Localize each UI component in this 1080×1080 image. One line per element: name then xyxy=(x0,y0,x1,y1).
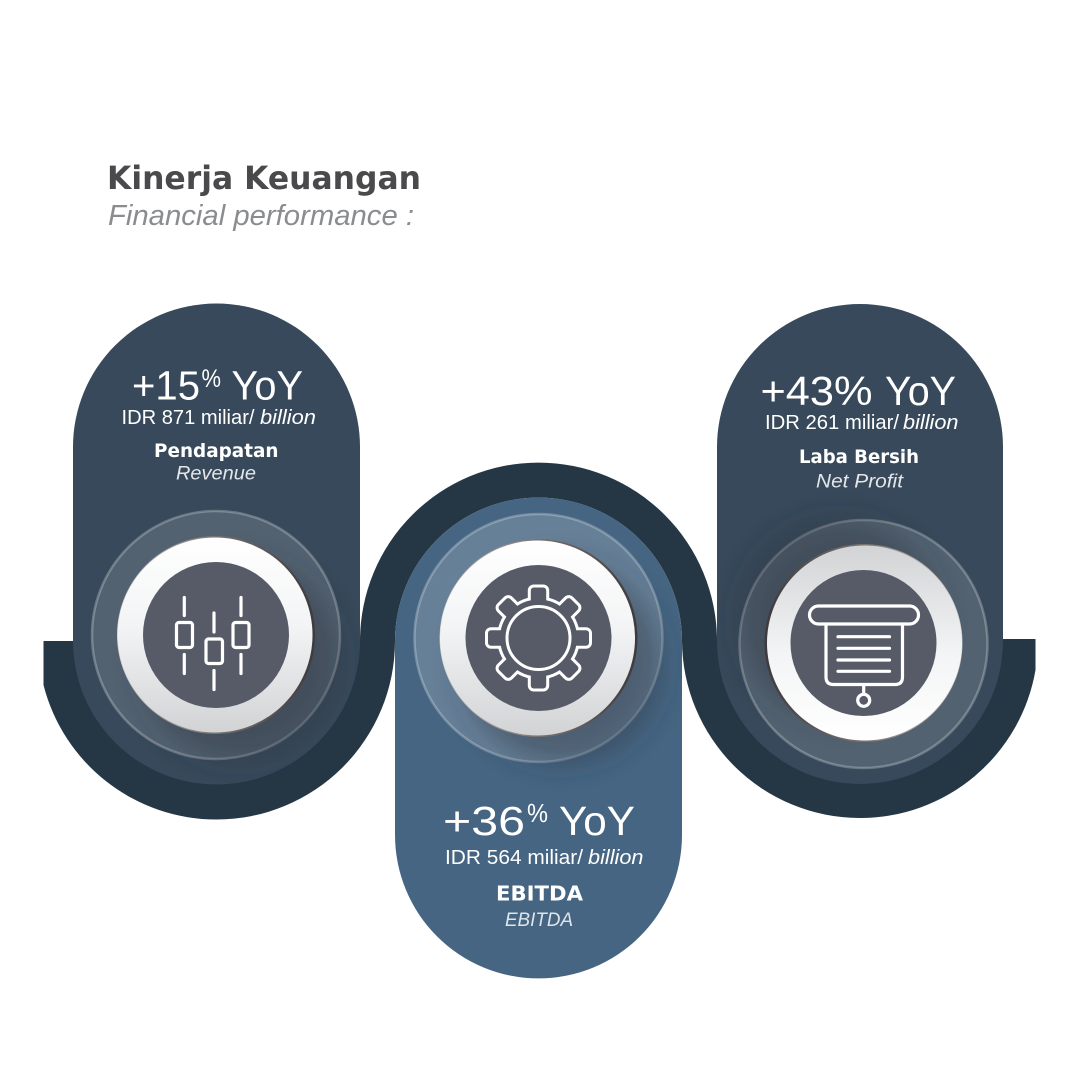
panel text: net profit xyxy=(760,368,958,492)
panel: revenue xyxy=(73,304,360,784)
panel text: revenue: Revenue xyxy=(176,464,256,484)
icon: candlestick chart xyxy=(176,598,249,690)
icon: projector screen xyxy=(810,606,918,706)
panel text: net profit: +43% xyxy=(760,368,872,414)
panel text: net profit: Laba Bersih xyxy=(799,446,919,468)
panel text: revenue xyxy=(122,362,316,484)
panel text: EBITDA xyxy=(443,798,644,931)
panel text: net profit: IDR 261 miliar/ xyxy=(765,412,899,434)
panel text: revenue: +15 xyxy=(132,362,200,408)
panel text: revenue: Pendapatan xyxy=(154,440,278,462)
title: Kinerja Keuangan xyxy=(107,159,421,197)
panel text: EBITDA: % xyxy=(527,798,548,828)
panel text: revenue: % xyxy=(202,365,221,393)
icon: gear xyxy=(488,588,589,688)
panel: net profit xyxy=(717,304,1003,784)
panel text: EBITDA: EBITDA xyxy=(505,910,573,931)
panel: EBITDA xyxy=(395,498,682,978)
panel text: EBITDA: IDR 564 miliar/ xyxy=(445,847,583,869)
panel text: net profit: YoY xyxy=(885,368,956,414)
panel text: revenue: YoY xyxy=(232,362,303,408)
panel text: EBITDA: +36 xyxy=(443,798,525,844)
panel text: net profit: billion xyxy=(903,412,958,434)
panel text: EBITDA: billion xyxy=(588,847,644,869)
panel text: net profit: Net Profit xyxy=(816,472,904,492)
panel text: EBITDA: EBITDA xyxy=(496,882,584,906)
wave ribbon xyxy=(44,463,1036,820)
panel text: EBITDA: YoY xyxy=(559,798,635,844)
badge: revenue xyxy=(92,511,340,760)
badge: net profit xyxy=(740,520,988,768)
badge: EBITDA xyxy=(414,514,662,763)
subtitle: Financial performance : xyxy=(108,200,414,232)
panel text: revenue: IDR 871 miliar/ xyxy=(122,407,255,429)
panel text: revenue: billion xyxy=(260,407,316,429)
